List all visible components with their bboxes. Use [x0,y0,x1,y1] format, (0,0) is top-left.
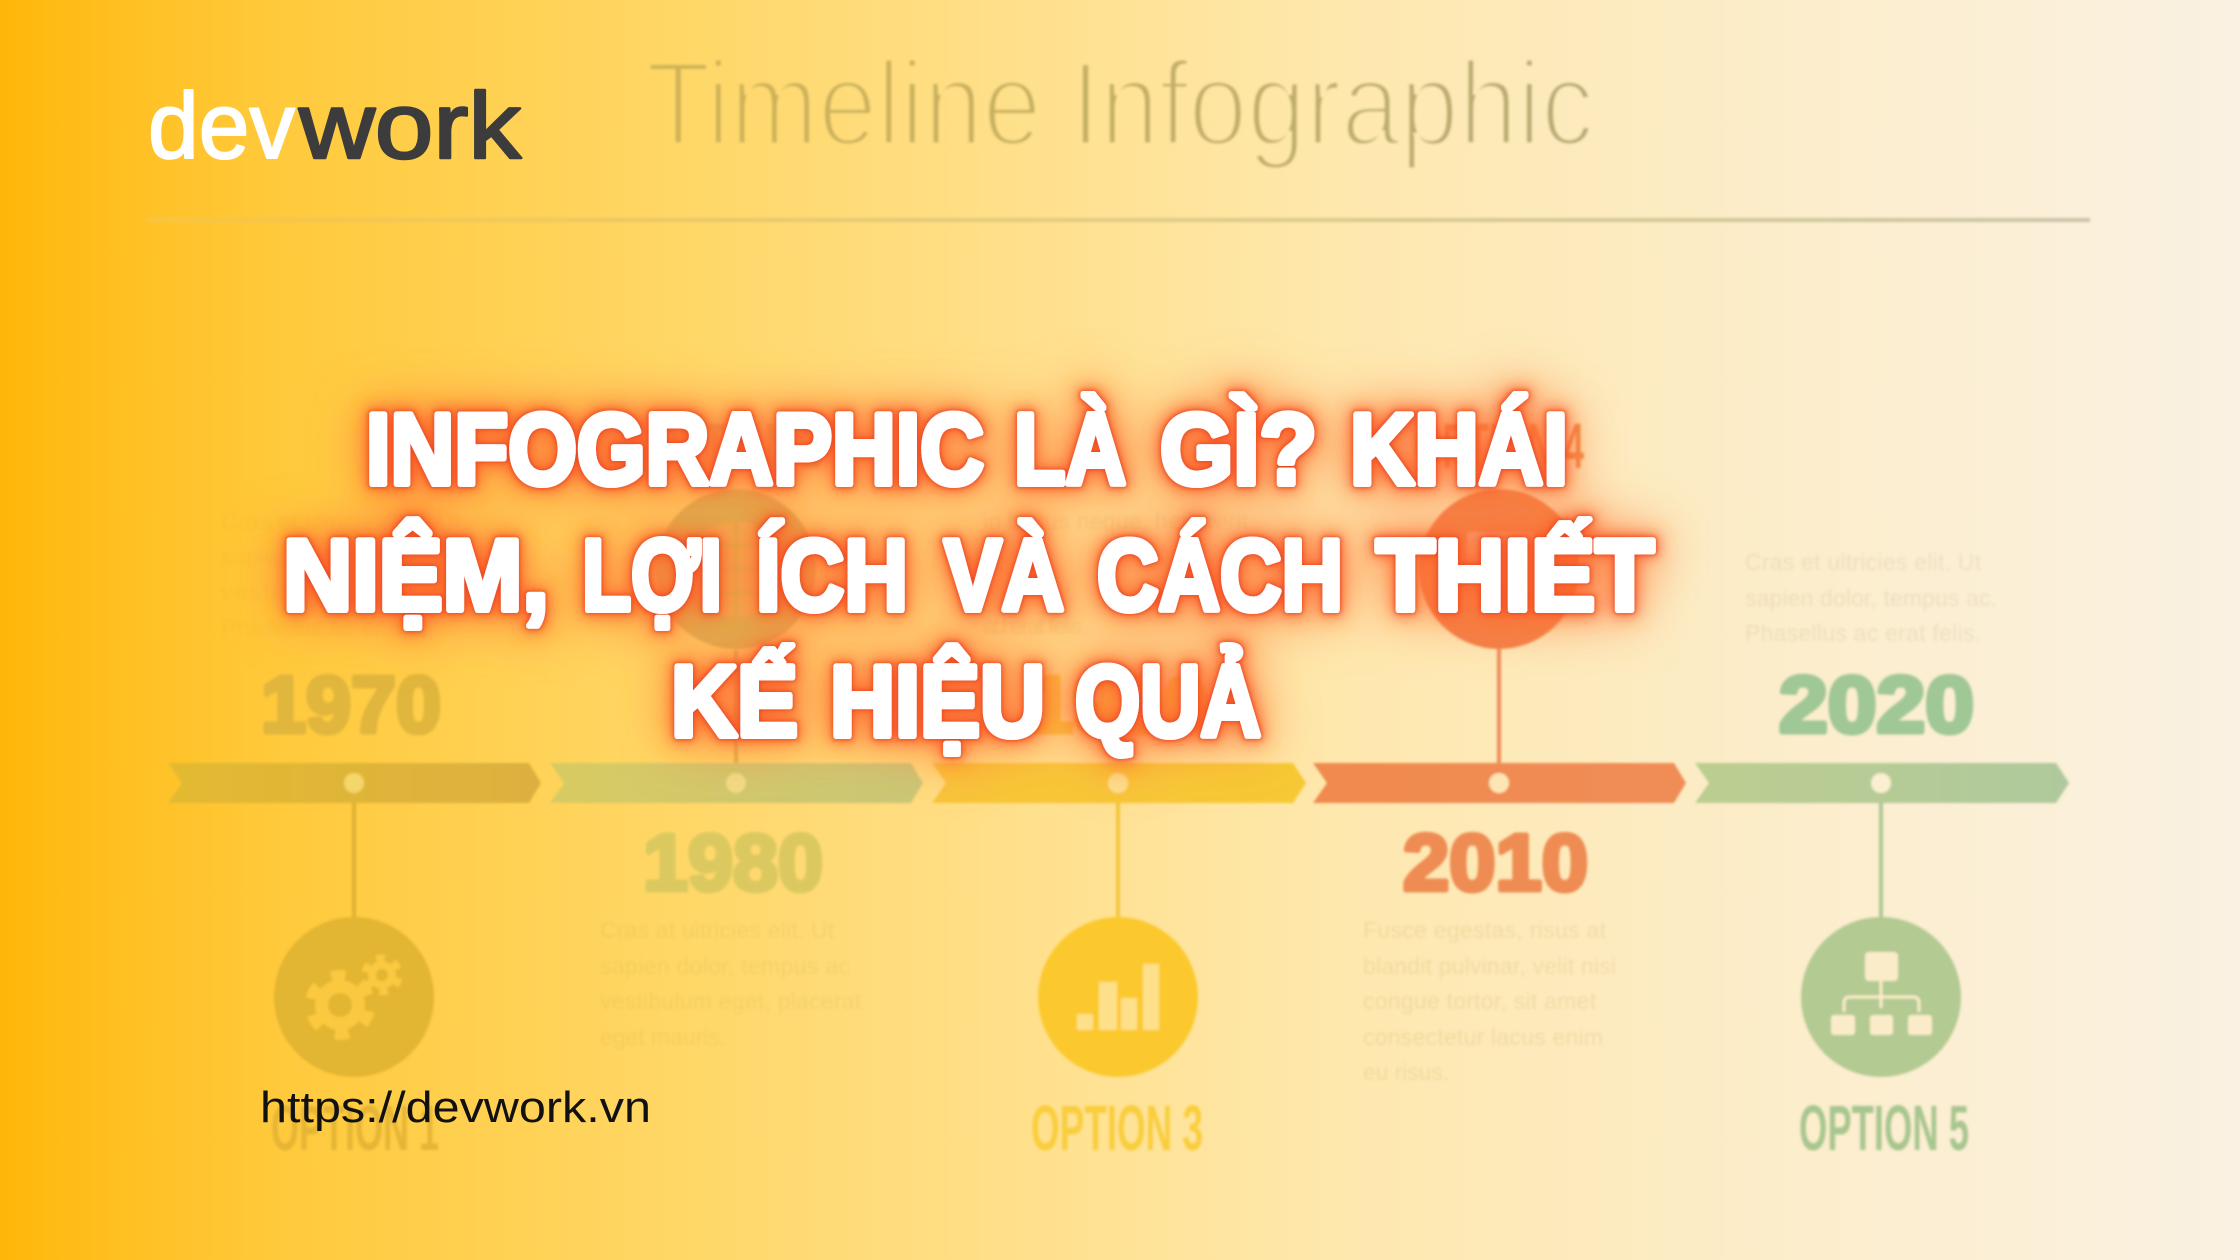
headline line 1: KHÁI [1350,394,1568,506]
label option 4: OPTION 4 [1414,410,1584,482]
label option 3: OPTION 3 [1031,1092,1203,1164]
logo: devwork [148,73,522,178]
headline line 1 [366,394,1568,506]
headline line 1: GÌ? [1160,394,1317,506]
headline line 1: INFOGRAPHIC [366,394,984,506]
headline line 3: KẾ [671,646,798,758]
upper description 1970: sapien dolor, tempus ac [221,544,471,570]
column 1990: option 3 [983,508,1249,1164]
connector and node 5 [1879,803,1883,920]
icon: globe [656,489,816,763]
description 2010: eu risus. [1363,1059,1449,1085]
description 1980: vestibulum eget, placerat [600,988,862,1014]
upper description 1990: au erat felis. [983,613,1087,639]
connector and node 3 [1116,803,1120,920]
label option 5: OPTION 5 [1799,1092,1969,1164]
description 2010: consectetur lacus enim [1363,1024,1603,1050]
headline line 3: HIỆU [830,646,1045,758]
icon: gears [274,917,434,1077]
headline line 2: VÀ [944,520,1064,632]
icon: monitor [1419,489,1579,763]
headline line 2: ÍCH [756,520,908,632]
headline line 3: QUẢ [1075,645,1261,758]
description 1980: eget mauris. [600,1024,726,1050]
timeline arrows [168,763,2069,803]
description 1980: sapien dolor, tempus ac [600,953,850,979]
upper description 2020: Cras et ultricies elit. Ut [1745,549,1982,575]
upper description 2020: Phasellus ac erat felis. [1745,620,1981,646]
label option 1: OPTION 1 [271,1092,439,1164]
headline with orange glow [283,394,1654,758]
url: https://devwork.vn: https://devwork.vn [260,1083,651,1132]
year 1990: 1990 [1028,660,1208,749]
description 2010: congue tortor, sit amet [1363,988,1597,1014]
headline line 2: THIẾT [1376,520,1654,632]
faded timeline infographic [146,37,2090,1164]
column 1980: option 2 [600,410,862,1050]
headline line 1: LÀ [1014,394,1126,506]
label option 2: OPTION 2 [651,410,821,482]
headline line 2 [283,520,1654,632]
year 2020: 2020 [1779,660,1974,749]
logo: devwork: work [298,73,522,178]
column 2010: option 4 [1363,410,1616,1085]
headline line 2: CÁCH [1097,520,1343,632]
upper description 1970: Phasellus ac erat felis. [221,615,457,641]
year 1970: 1970 [261,660,441,749]
icon: org chart [1801,917,1961,1077]
description 2010: blandit pulvinar, velit nisi [1363,953,1616,979]
connector and node 1 [352,803,356,920]
description 2010: Fusce egestas, risus at [1363,917,1607,943]
description 1980: Cras at ultricies elit. Ut [600,917,835,943]
logo: devwork: dev [148,73,295,178]
faded title: Timeline Infographic: Timeline Infographic [646,37,1594,171]
column 2020: option 5 [1745,549,1997,1164]
year 2010: 2010 [1403,818,1588,907]
headline line 2: LỢI [582,520,722,632]
column 1970: option 1 [221,508,471,1164]
headline line 2: NIỆM, [283,520,549,632]
upper description 1970: Cras et ultricies elit. Ut [221,508,462,534]
upper description 1990: in luctus neque, hendrerit [983,508,1249,534]
upper description 2020: sapien dolor, tempus ac. [1745,585,1997,611]
upper description 1970: vestibulum eget, [221,579,421,605]
headline line 3 [671,645,1261,758]
icon: bar chart [1038,917,1198,1077]
header divider [146,218,2090,222]
year 1980: 1980 [643,818,823,907]
